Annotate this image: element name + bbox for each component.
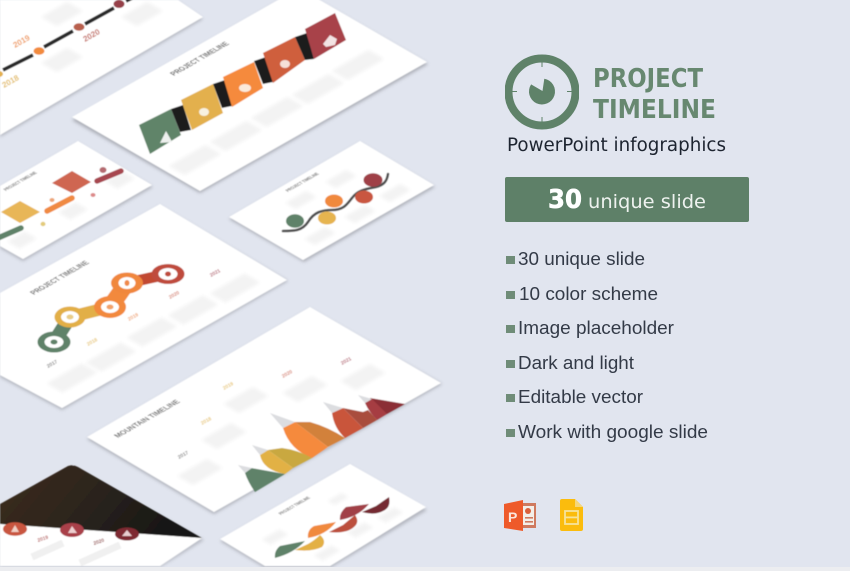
text blocks [169,50,384,175]
slide: chain timeline [0,204,288,410]
slide: mountain timeline: MOUNTAIN TIMELINE [112,398,183,439]
year labels: 2018 [200,416,213,427]
markers [3,522,27,536]
title: PROJECT TIMELINE [168,40,232,77]
slide: dark line timeline (top left) [0,0,203,137]
mountains [238,395,405,492]
title: PROJECT [593,64,703,94]
bullet item: image placeholder: Image placeholder [518,317,674,338]
slide: leaf timeline: PROJECT TIMELINE [278,496,313,516]
slide: diamond timeline: PROJECT TIMELINE [3,171,39,192]
button: 30 unique slide: 30 [548,185,582,215]
icon: PowerPoint: P [508,509,517,525]
year labels: 2021 [209,268,222,279]
slide: dark line timeline (top left): 2018 [1,73,21,90]
icon: Google Slides [560,499,583,531]
slide: chain timeline: PROJECT TIMELINE [28,259,92,296]
year labels: 2020 [281,369,294,380]
leaves [275,497,390,558]
year labels: 2018 [86,337,99,348]
year labels: 2019 [222,381,235,392]
bullet item: dark and light: Dark and light [518,352,634,373]
slide mockups [0,0,442,568]
title: TIMELINE [593,95,716,125]
year labels [177,356,353,461]
slide: dark line timeline (top left): 2020 [82,27,102,44]
slide: dark photo timeline [0,465,204,567]
slide: leaf timeline [220,464,427,568]
slide: diamond timeline [0,141,153,261]
ribbon segments [139,13,346,154]
button: 30 unique slide: unique slide [588,191,706,213]
year labels: 2021 [340,356,353,367]
year labels [46,268,222,370]
button: 30 unique slide [505,177,749,222]
subtitle: PowerPoint infographics [507,135,726,156]
slide: wave timeline [229,141,435,262]
title [593,64,716,125]
bullet item: 30 unique slide: 30 unique slide [518,248,645,269]
year labels: 2020 [168,290,181,301]
slide: dark line timeline (top left): 2019 [12,33,32,50]
bullet item: work with google slide: Work with google slide [518,421,708,442]
icon: PowerPoint [504,500,536,531]
markers [286,214,304,228]
wave line [283,174,388,231]
slide: wave timeline: PROJECT TIMELINE [285,172,321,193]
slide: dark photo timeline: 2019 [37,535,49,544]
feature list [506,248,708,442]
year labels: 2017 [46,359,59,370]
logo: clock icon [508,58,576,126]
bullet item: editable vector: Editable vector [518,386,643,407]
year labels: 2017 [177,450,190,461]
slide: project timeline folded ribbon [72,0,428,193]
year labels: 2019 [127,312,140,323]
chain [38,264,184,352]
slide: dark photo timeline: 2020 [93,538,105,547]
bottom strip [0,567,850,571]
photo band [0,465,202,538]
bullet item: 10 color scheme: 10 color scheme [519,283,658,304]
slide: mountain timeline [87,307,442,514]
